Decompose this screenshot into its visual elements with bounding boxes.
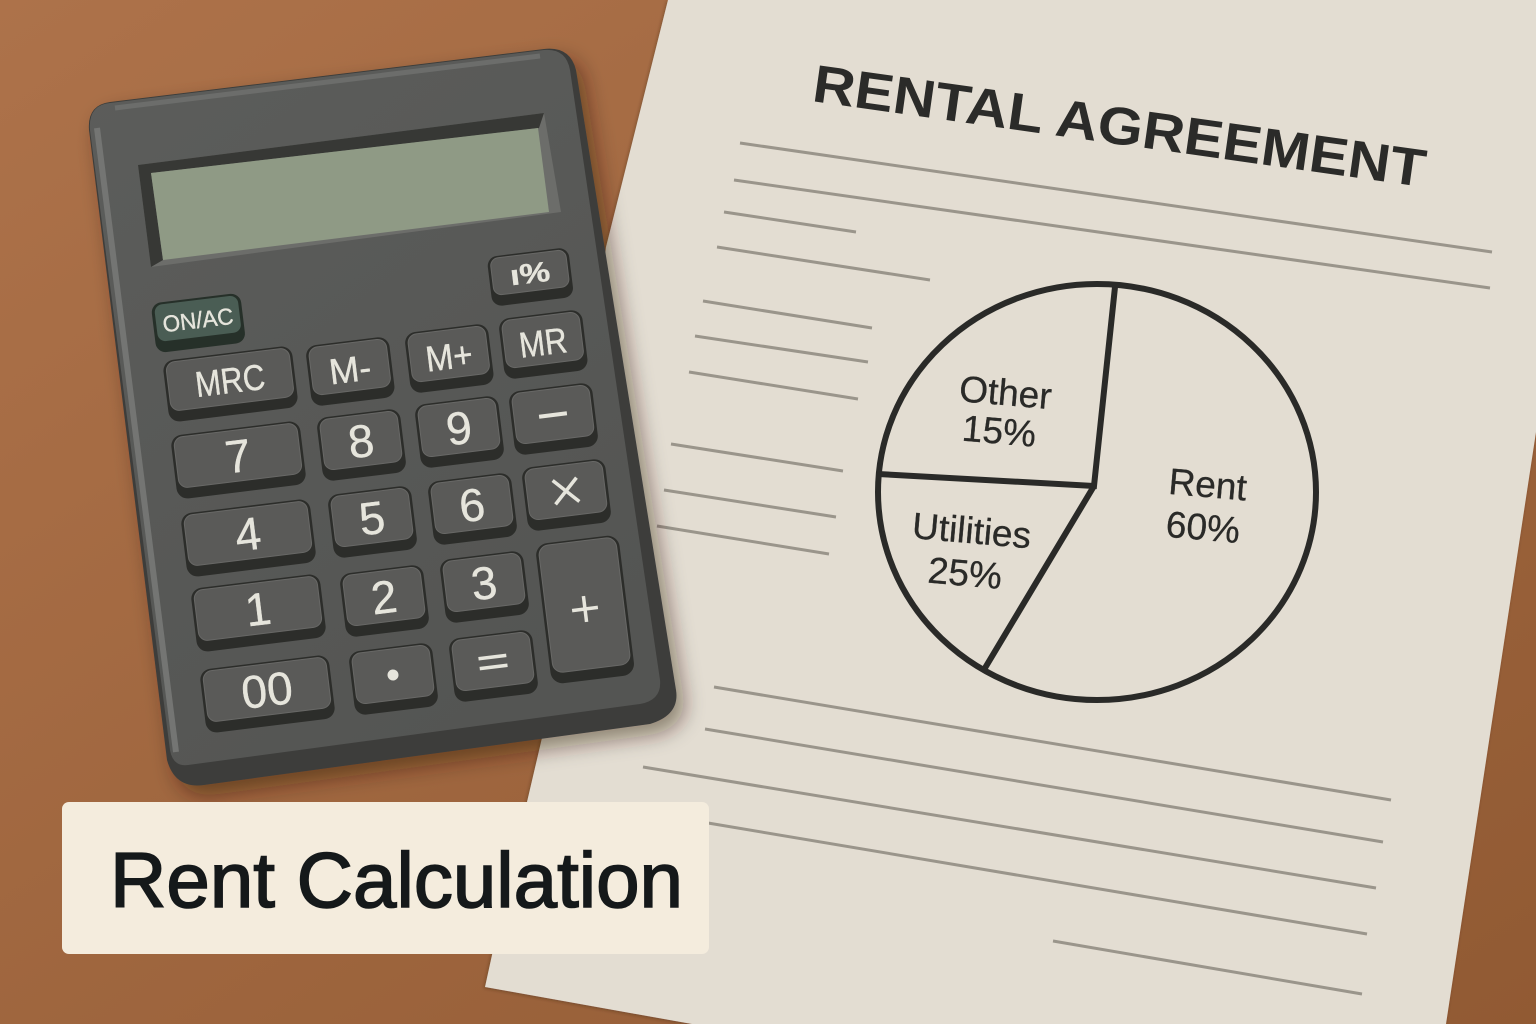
label: rent 60%: Rent xyxy=(1167,461,1249,509)
key: 00 xyxy=(199,654,336,734)
key: m- xyxy=(305,336,396,407)
key: 4 xyxy=(180,498,317,578)
key: 7 xyxy=(170,420,307,500)
label: rent 60%: 60% xyxy=(1164,504,1242,551)
key: m+ xyxy=(404,323,495,394)
key: 6: 6 xyxy=(456,478,488,532)
key: mr: MR xyxy=(517,319,569,366)
key: mr xyxy=(498,309,589,380)
key: minus xyxy=(508,382,599,456)
lower text lines xyxy=(643,687,1391,994)
label: utilities 25% xyxy=(907,505,1033,599)
label: utilities 25%: 25% xyxy=(926,550,1004,597)
key: percent xyxy=(487,247,574,307)
key: 9: 9 xyxy=(443,401,475,455)
key: 7: 7 xyxy=(222,429,254,483)
key: on/ac xyxy=(151,293,246,353)
label: other 15% xyxy=(954,368,1053,456)
key: 9 xyxy=(414,395,505,469)
upper text lines xyxy=(657,143,1492,554)
label: utilities 25%: Utilities xyxy=(911,505,1033,556)
calculator xyxy=(89,49,676,785)
display screen xyxy=(138,113,561,267)
key: 3: 3 xyxy=(468,556,500,610)
key: 5: 5 xyxy=(356,491,388,545)
label: other 15%: Other xyxy=(958,368,1053,417)
key: equals xyxy=(448,629,539,703)
key: 8 xyxy=(316,408,407,482)
label: other 15%: 15% xyxy=(960,408,1038,455)
key: on/ac: ON/AC xyxy=(161,303,235,337)
key: 3 xyxy=(439,550,530,624)
key: decimal point xyxy=(348,642,439,716)
caption badge xyxy=(62,802,709,954)
key: 8: 8 xyxy=(345,414,377,468)
key: 2: 2 xyxy=(368,570,400,624)
key: 4: 4 xyxy=(232,507,264,561)
key: percent: ı% xyxy=(508,256,552,291)
pie chart xyxy=(878,284,1316,700)
key: multiply xyxy=(521,458,612,532)
key: 00: 00 xyxy=(238,661,296,719)
key: m-: M- xyxy=(327,347,373,392)
key: mrc: MRC xyxy=(193,356,267,405)
key: 1: 1 xyxy=(242,582,274,636)
key: 6 xyxy=(427,472,518,546)
caption text: Rent Calculation xyxy=(110,836,683,924)
label: rent 60% xyxy=(1163,461,1249,551)
document title: RENTAL AGREEMENT xyxy=(809,54,1430,199)
key: 1 xyxy=(190,573,327,653)
key: mrc xyxy=(162,345,299,423)
key: 2 xyxy=(339,564,430,638)
key: plus xyxy=(535,534,635,685)
key: m+: M+ xyxy=(423,333,475,380)
rental agreement document xyxy=(485,0,1536,1024)
key: 5 xyxy=(327,485,418,559)
